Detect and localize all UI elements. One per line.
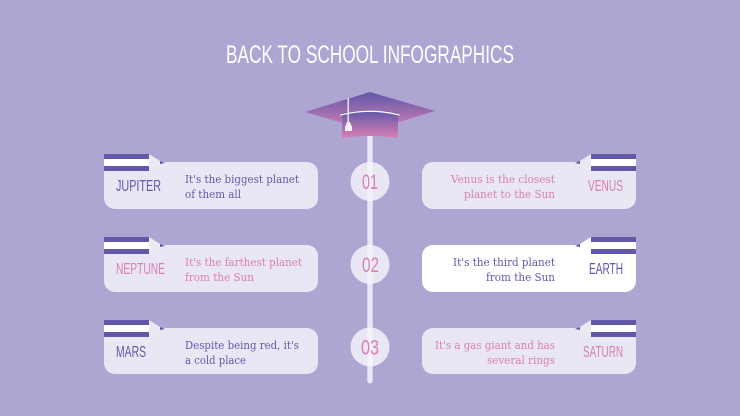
title: BACK TO SCHOOL INFOGRAPHICS bbox=[226, 41, 514, 69]
number badge 01: 01 bbox=[362, 171, 378, 194]
label: Earth: EARTH bbox=[589, 261, 623, 278]
text: Jupiter description: It's the biggest planet bbox=[185, 172, 299, 186]
label: Mars: MARS bbox=[116, 344, 146, 361]
panel: Jupiter bbox=[104, 154, 318, 209]
timeline line bbox=[367, 130, 373, 384]
text: Saturn description: several rings bbox=[487, 353, 555, 367]
panel: Venus bbox=[422, 154, 636, 209]
number badge 02 bbox=[350, 245, 390, 284]
icon: Earth flag bbox=[575, 237, 636, 255]
text: Mars description: a cold place bbox=[185, 353, 246, 367]
text: Venus description: Venus is the closest bbox=[450, 172, 555, 186]
panel: Mars bbox=[104, 320, 318, 374]
number badge 03 bbox=[350, 328, 390, 366]
text: Neptune description: It's the farthest planet bbox=[185, 255, 302, 269]
text: Neptune description: from the Sun bbox=[185, 270, 255, 284]
text: Earth description: from the Sun bbox=[486, 270, 556, 284]
label: Neptune: NEPTUNE bbox=[116, 261, 165, 278]
icon: Mars flag bbox=[104, 320, 165, 338]
panel: Neptune bbox=[104, 237, 318, 292]
icon: Venus flag bbox=[575, 154, 636, 172]
number badge 02: 02 bbox=[362, 254, 379, 277]
text: Jupiter description: of them all bbox=[185, 187, 241, 201]
icon: Jupiter flag bbox=[104, 154, 165, 172]
label: Venus: VENUS bbox=[588, 178, 623, 195]
text: Earth description: It's the third planet bbox=[453, 255, 555, 269]
number badge 01 bbox=[350, 162, 390, 201]
panel: Earth bbox=[422, 237, 636, 292]
panel: Saturn bbox=[422, 320, 636, 374]
text: Mars description: Despite being red, it's bbox=[185, 338, 299, 352]
text: Venus description: planet to the Sun bbox=[464, 187, 556, 201]
icon: Neptune flag bbox=[104, 237, 165, 255]
text: Saturn description: It's a gas giant and has bbox=[435, 338, 555, 352]
number badge 03: 03 bbox=[361, 336, 379, 360]
icon: Saturn flag bbox=[575, 320, 636, 338]
label: Saturn: SATURN bbox=[583, 344, 623, 361]
icon: graduation cap bbox=[305, 92, 435, 138]
label: Jupiter: JUPITER bbox=[116, 178, 161, 195]
